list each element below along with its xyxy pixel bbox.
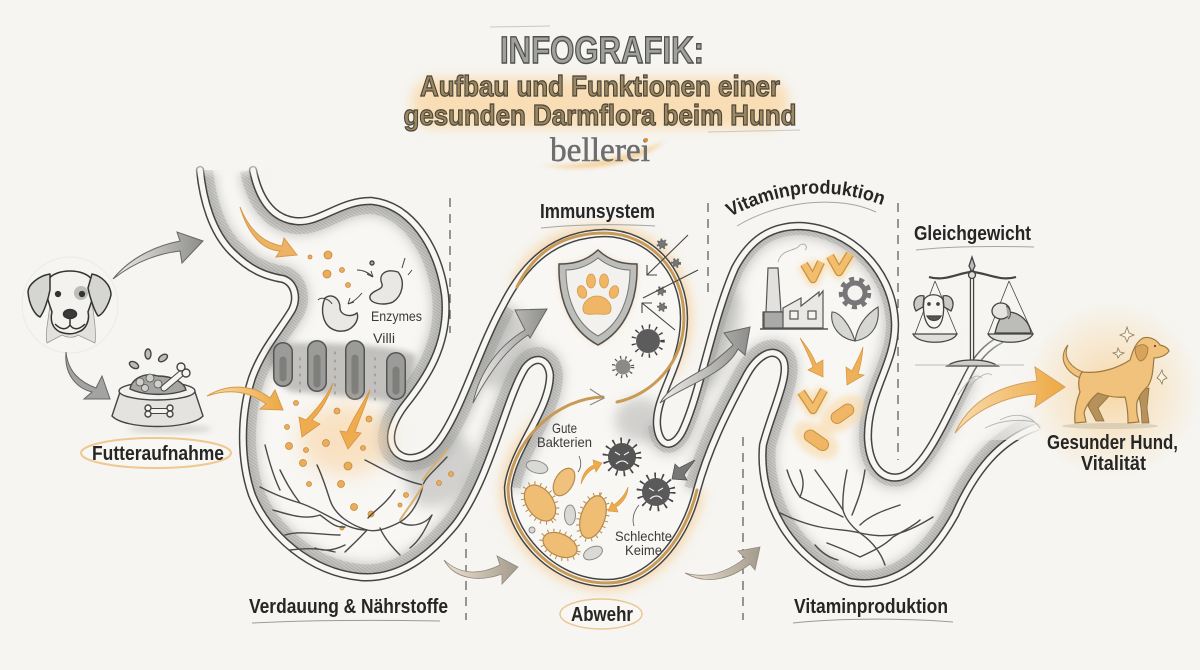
veins lower chamber — [780, 470, 933, 565]
gut interior — [204, 170, 1034, 580]
label: Enzymes: Enzymes — [371, 308, 422, 324]
arrow: dog to bowl — [66, 352, 110, 399]
bad germs — [606, 440, 672, 508]
subtitle line 1: Aufbau und Funktionen einer — [420, 71, 780, 103]
label: Futteraufnahme — [81, 438, 231, 468]
happy dog on scale — [923, 295, 944, 328]
label: Gesunder Hund, Vitalitaet: Vitalität — [1081, 453, 1146, 475]
label: Futteraufnahme: Futteraufnahme — [92, 443, 224, 465]
tan arrow to vitamin chamber — [685, 547, 760, 580]
gray arrow into germ zone — [672, 460, 695, 480]
orange arrow bowl to gut — [207, 387, 283, 410]
orange arrows in vitamin chamber — [800, 338, 864, 385]
nutrient dots — [284, 251, 454, 530]
small arrow between zones — [590, 389, 604, 405]
healthy golden dog — [1024, 302, 1200, 478]
label: Gute Bakterien — [537, 420, 592, 472]
vitamin capsules — [787, 387, 871, 467]
shaded pockets — [392, 288, 751, 520]
label: Abwehr — [560, 599, 642, 629]
gut tube — [190, 160, 1050, 600]
leaf icon — [832, 307, 878, 341]
label: Gesunder Hund, Vitalitaet — [1047, 432, 1178, 475]
label: Gute Bakterien: Gute — [552, 420, 577, 436]
label: Immunsystem: Immunsystem — [540, 201, 655, 223]
factory icon — [760, 244, 828, 329]
subtitle line 2: gesunden Darmflora beim Hund — [404, 100, 796, 132]
label: Schlechte Keime: Keime — [625, 542, 662, 558]
orange arrow into stomach top — [240, 207, 297, 257]
body — [1075, 337, 1169, 423]
small dog on scale — [995, 312, 1031, 333]
food bowl icon — [112, 349, 212, 433]
sketch wisps — [958, 374, 1040, 428]
orange zone outlines — [517, 233, 684, 402]
gray arrow to vitamin chamber — [660, 327, 750, 403]
logo: bellerei: bellerei — [550, 132, 650, 169]
gut outer wall — [200, 170, 1037, 583]
enzyme shapes — [318, 258, 412, 331]
arrow: dog to gut — [113, 232, 203, 279]
bone in bowl — [164, 372, 183, 388]
villi — [269, 343, 415, 402]
tan arrow to defense zone — [444, 556, 518, 584]
gray arrow tube to immune system — [473, 309, 547, 403]
good bacteria — [515, 458, 614, 565]
dashed section dividers — [450, 198, 898, 620]
vitamin V icons — [801, 254, 850, 410]
fade tube ends — [190, 160, 270, 178]
bone on bowl — [150, 408, 168, 414]
orange arrows through villi — [299, 383, 370, 449]
tail — [1063, 345, 1089, 380]
dog head icon — [22, 257, 118, 353]
label: Gute Bakterien: Bakterien — [537, 434, 592, 450]
big orange arrow to healthy dog — [955, 367, 1065, 433]
shield with paw — [559, 250, 637, 345]
label: Vitaminproduktion curved: Vitaminproduktion — [724, 180, 884, 215]
balance scale with dogs — [913, 257, 1033, 366]
label: Villi: Villi — [373, 330, 395, 346]
gear icon — [841, 279, 869, 307]
title block — [404, 26, 800, 132]
orange glow around immune and defense zones — [508, 233, 697, 583]
label: Gesunder Hund, Vitalitaet: Gesunder Hund, — [1047, 432, 1178, 454]
far legs — [1088, 388, 1149, 423]
label: Vitaminproduktion bottom: Vitaminproduktion — [794, 596, 948, 618]
arrows between bacteria and germs — [581, 460, 628, 512]
label: Verdauung und Naehrstoffe: Verdauung & Nährstoffe — [249, 596, 448, 618]
label: Abwehr: Abwehr — [571, 604, 633, 626]
title: Infografik: INFOGRAFIK: — [500, 30, 704, 72]
pathogens attacking the shield — [614, 235, 698, 376]
pencil shading along walls — [200, 170, 1037, 583]
label: Schlechte Keime: Schlechte — [615, 528, 672, 544]
label: Schlechte Keime — [615, 505, 672, 558]
veins stomach — [260, 445, 447, 555]
label: Gleichgewicht: Gleichgewicht — [914, 223, 1031, 245]
